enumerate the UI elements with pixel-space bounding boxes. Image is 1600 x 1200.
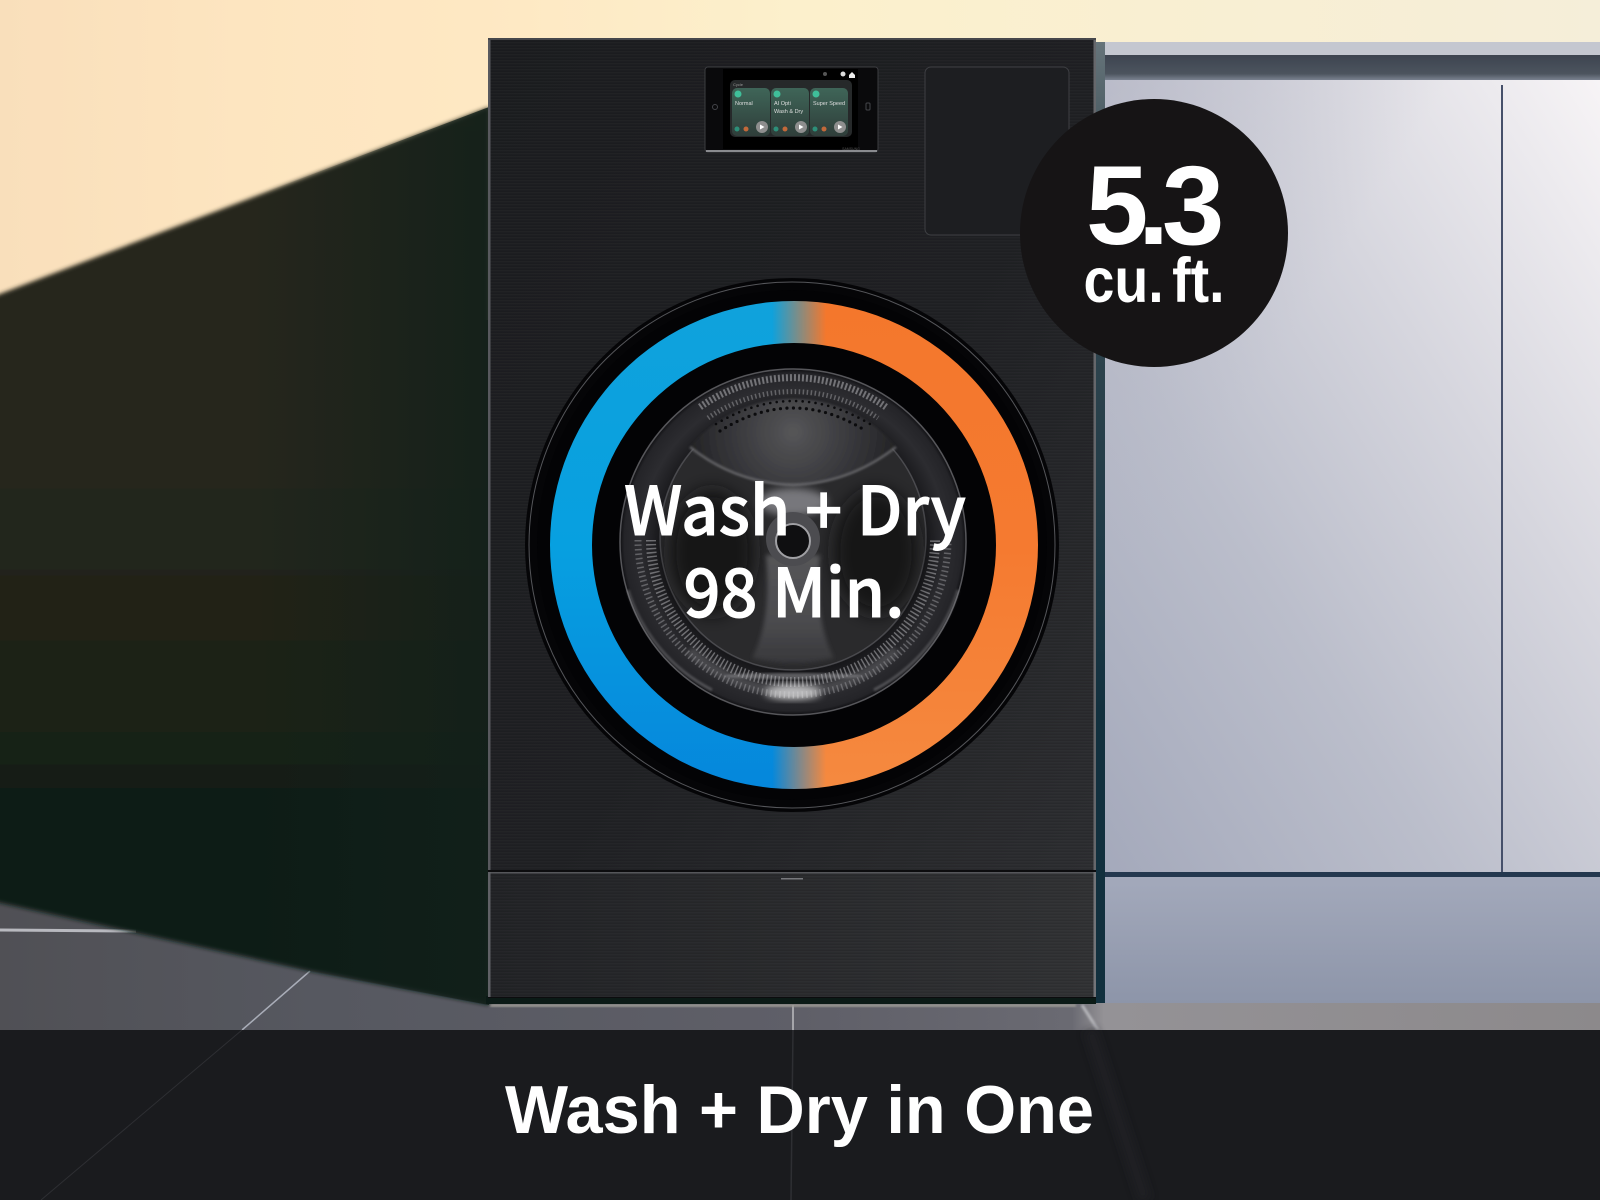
washer pedestal	[488, 870, 1096, 998]
drum	[619, 368, 967, 716]
top-right hatch panel	[925, 67, 1069, 235]
bottom highlight	[765, 685, 821, 699]
upper dome	[690, 399, 896, 485]
cabinet on the right	[1096, 42, 1600, 1003]
capacity badge: 5.3	[1086, 143, 1224, 268]
cycle card: AI Opti Wash & Dry: Wash & Dry	[774, 109, 803, 115]
blue to orange ring	[540, 295, 1050, 795]
washer door	[525, 278, 1059, 812]
door text: 98 Min.	[684, 540, 904, 637]
cycle card: Super Speed: Super Speed	[813, 101, 845, 107]
background: warm wall	[0, 0, 1600, 320]
hub	[759, 488, 827, 516]
washer body	[488, 38, 1096, 870]
door text	[624, 458, 966, 637]
door text: Wash + Dry	[624, 458, 966, 555]
cycle card: AI Opti Wash & Dry: AI Opti	[774, 101, 791, 107]
background: floor	[0, 880, 1600, 1200]
cycle card: Super Speed	[810, 88, 848, 136]
control display: Cycle	[733, 82, 744, 87]
capacity badge: cu. ft.	[1084, 246, 1224, 316]
bottom caption bar	[0, 1030, 1600, 1200]
control display	[705, 67, 878, 152]
control display: SAMSUNG	[842, 147, 860, 151]
diagonal wall shadow	[0, 107, 1096, 1005]
cycle card: Normal: Normal	[735, 101, 753, 107]
dark pockets between spokes	[670, 490, 754, 614]
caption: Wash + Dry in One	[505, 1072, 1094, 1148]
capacity badge	[1020, 99, 1288, 367]
glass lattice texture	[628, 378, 958, 695]
cycle card: AI Opti Wash & Dry	[771, 88, 809, 136]
cycle card: Normal	[732, 88, 770, 136]
perforations	[720, 408, 866, 431]
lower spoke	[752, 555, 834, 663]
